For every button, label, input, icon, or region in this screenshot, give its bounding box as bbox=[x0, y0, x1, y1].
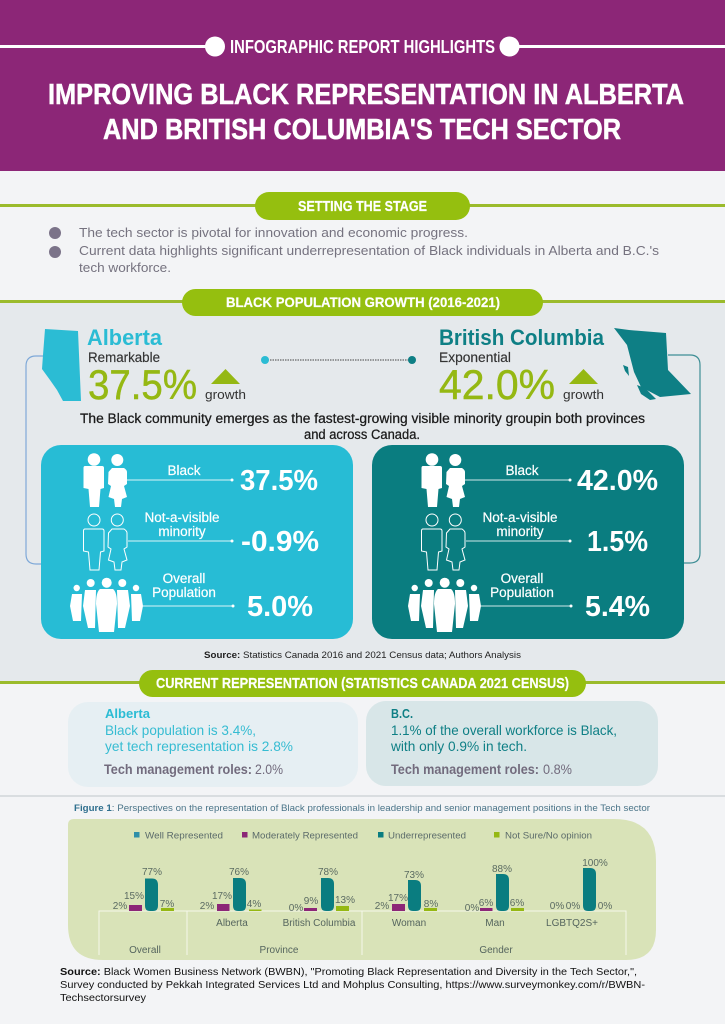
data labels: 0% bbox=[465, 903, 479, 914]
card: British Columbia: Tech management roles: bbox=[391, 762, 539, 777]
chart legend: Moderately Represented bbox=[252, 830, 358, 842]
icon: Black professionals bbox=[422, 453, 465, 507]
figure caption: Figure 1: Perspectives on the representation of Black professionals in leadership and senior management positions in the Tech sector bbox=[74, 803, 650, 814]
bullet list: tech workforce. bbox=[79, 260, 171, 275]
data labels: 17% bbox=[212, 891, 232, 902]
data labels: 4% bbox=[247, 899, 261, 910]
header banner bbox=[0, 0, 725, 171]
data labels: 2% bbox=[113, 901, 127, 912]
row: Black: Black bbox=[505, 463, 539, 478]
data labels: 77% bbox=[142, 867, 162, 878]
bullet list: Current data highlights significant underrepresentation of Black individuals in Alberta and B.C.'s bbox=[79, 243, 660, 258]
row: not-a-visible minority bbox=[128, 510, 319, 558]
connector: Alberta bbox=[26, 356, 43, 564]
category labels: Man bbox=[485, 918, 505, 929]
row: Black bbox=[465, 463, 658, 497]
row: overall population: 5.0% bbox=[247, 591, 313, 623]
data labels: 6% bbox=[510, 898, 524, 909]
data labels: 0% bbox=[289, 903, 303, 914]
row: overall population bbox=[481, 571, 650, 623]
source: survey: Source: Black Women Business Network (BWBN), "Promoting Black Representation and Diversity in the Tech Sector,", bbox=[60, 966, 637, 978]
source: survey: Survey conducted by Pekkah Integrated Services Ltd and Mohplus Consulting, https://www.surveymonkey.com/r/BWBN- bbox=[60, 979, 646, 991]
bullet list bbox=[49, 225, 660, 275]
card: British Columbia: 0.8% bbox=[543, 762, 572, 777]
section: current representation bbox=[0, 670, 725, 787]
data labels: 7% bbox=[160, 899, 174, 910]
Alberta headline: Remarkable bbox=[88, 350, 160, 365]
icon: not-a-visible-minority professionals bbox=[84, 514, 127, 570]
row: not-a-visible minority: minority bbox=[496, 524, 544, 539]
data labels: 6% bbox=[479, 898, 493, 909]
title bbox=[48, 79, 684, 146]
row: not-a-visible minority: Not-a-visible bbox=[482, 510, 558, 525]
card: Alberta: 2.0% bbox=[255, 762, 283, 777]
row: Black bbox=[127, 463, 318, 497]
category labels: LGBTQ2S+ bbox=[546, 918, 598, 929]
heading: setting the stage: SETTING THE STAGE bbox=[298, 199, 427, 215]
data labels: 73% bbox=[404, 870, 424, 881]
row: overall population: Population bbox=[490, 585, 554, 600]
card: Alberta: Black population is 3.4%, bbox=[105, 722, 256, 738]
British Columbia headline: British Columbia bbox=[439, 325, 605, 350]
row: not-a-visible minority: Not-a-visible bbox=[144, 510, 220, 525]
chart legend: Not Sure/No opinion bbox=[505, 830, 592, 842]
source: survey: Techsectorsurvey bbox=[60, 992, 147, 1004]
title: AND BRITISH COLUMBIA'S TECH SECTOR bbox=[103, 114, 621, 146]
data labels: 0% bbox=[550, 901, 564, 912]
Alberta headline: 37.5% bbox=[88, 361, 197, 408]
bars: moderately represented bbox=[129, 904, 492, 911]
section: black population growth bbox=[0, 289, 725, 683]
category labels: Gender bbox=[479, 945, 513, 956]
connector: British Columbia bbox=[668, 355, 700, 563]
card: Alberta: Alberta bbox=[105, 706, 151, 721]
data labels: 8% bbox=[424, 899, 438, 910]
category labels: Woman bbox=[392, 918, 426, 929]
card: British Columbia: B.C. bbox=[391, 706, 413, 721]
row: Black: 42.0% bbox=[577, 465, 658, 497]
chart legend: Well Represented bbox=[145, 830, 223, 842]
panel: Alberta breakdown bbox=[41, 445, 353, 639]
card: British Columbia: 1.1% of the overall workforce is Black, bbox=[391, 722, 617, 738]
data labels: 0% bbox=[566, 901, 580, 912]
data labels: 13% bbox=[335, 895, 355, 906]
icon: Black professionals bbox=[84, 453, 127, 507]
bullet list: The tech sector is pivotal for innovation and economic progress. bbox=[79, 225, 468, 240]
British Columbia headline: Exponential bbox=[439, 350, 511, 365]
category table bbox=[99, 911, 626, 955]
dotted link between provinces bbox=[261, 356, 416, 364]
row: overall population: Population bbox=[152, 585, 216, 600]
data labels: 2% bbox=[200, 901, 214, 912]
data labels: 2% bbox=[375, 901, 389, 912]
statement text: and across Canada. bbox=[304, 427, 420, 442]
card: Alberta bbox=[68, 702, 358, 787]
row: not-a-visible minority: minority bbox=[158, 524, 206, 539]
bars: underrepresented bbox=[145, 868, 596, 911]
panel: British Columbia breakdown bbox=[372, 445, 684, 639]
data labels: 9% bbox=[304, 896, 318, 907]
card: British Columbia bbox=[366, 701, 658, 786]
icon: not-a-visible-minority professionals bbox=[422, 514, 465, 570]
data labels: 78% bbox=[318, 867, 338, 878]
British Columbia headline: growth bbox=[563, 387, 604, 402]
Alberta headline bbox=[87, 325, 246, 408]
British Columbia headline: 42.0% bbox=[439, 361, 555, 408]
data labels: 17% bbox=[388, 893, 408, 904]
row: not-a-visible minority: 1.5% bbox=[587, 526, 648, 558]
data labels bbox=[113, 858, 612, 914]
statement text bbox=[80, 411, 645, 442]
row: overall population: Overall bbox=[501, 571, 543, 586]
Alberta headline: Alberta bbox=[87, 325, 163, 350]
category labels: Alberta bbox=[216, 918, 248, 929]
data labels: 76% bbox=[229, 867, 249, 878]
row: Black: 37.5% bbox=[240, 465, 318, 497]
British Columbia headline bbox=[439, 325, 605, 408]
category labels: Province bbox=[260, 945, 299, 956]
row: overall population bbox=[143, 571, 313, 623]
Alberta headline: growth bbox=[205, 387, 246, 402]
divider band bbox=[0, 795, 725, 797]
icon: Alberta map bbox=[42, 329, 81, 401]
heading: current representation: CURRENT REPRESENTATION (STATISTICS CANADA 2021 CENSUS) bbox=[156, 675, 569, 692]
data labels: 15% bbox=[124, 891, 144, 902]
source: survey bbox=[60, 966, 646, 1004]
category labels: Overall bbox=[129, 945, 161, 956]
row: overall population: Overall bbox=[163, 571, 205, 586]
row: not-a-visible minority: -0.9% bbox=[241, 526, 319, 558]
data labels: 88% bbox=[492, 864, 512, 875]
data labels: 100% bbox=[582, 858, 608, 869]
card: British Columbia: with only 0.9% in tech. bbox=[390, 738, 527, 754]
card: Alberta: Tech management roles: bbox=[104, 762, 252, 777]
category labels: British Columbia bbox=[283, 918, 356, 929]
subtitle: INFOGRAPHIC REPORT HIGHLIGHTS bbox=[230, 37, 495, 57]
card: Alberta: yet tech representation is 2.8% bbox=[105, 738, 293, 754]
row: Black: Black bbox=[167, 463, 201, 478]
row: not-a-visible minority bbox=[466, 510, 648, 558]
source: census: Source: Statistics Canada 2016 and 2021 Census data; Authors Analysis bbox=[204, 650, 521, 661]
icon: British Columbia map bbox=[614, 328, 691, 400]
chart legend bbox=[134, 830, 592, 842]
icon: overall population bbox=[408, 578, 481, 632]
heading: population growth: BLACK POPULATION GROWTH (2016-2021) bbox=[226, 294, 500, 310]
data labels: 0% bbox=[598, 901, 612, 912]
row: overall population: 5.4% bbox=[585, 591, 650, 623]
chart legend: Underrepresented bbox=[388, 830, 466, 842]
chart: perspectives on representation bbox=[68, 819, 656, 960]
category labels bbox=[129, 918, 598, 956]
icon: overall population bbox=[70, 578, 143, 632]
section: setting the stage bbox=[0, 192, 725, 275]
statement text: The Black community emerges as the fastest-growing visible minority groupin both provinces bbox=[80, 411, 645, 426]
bars: not sure bbox=[161, 906, 524, 911]
